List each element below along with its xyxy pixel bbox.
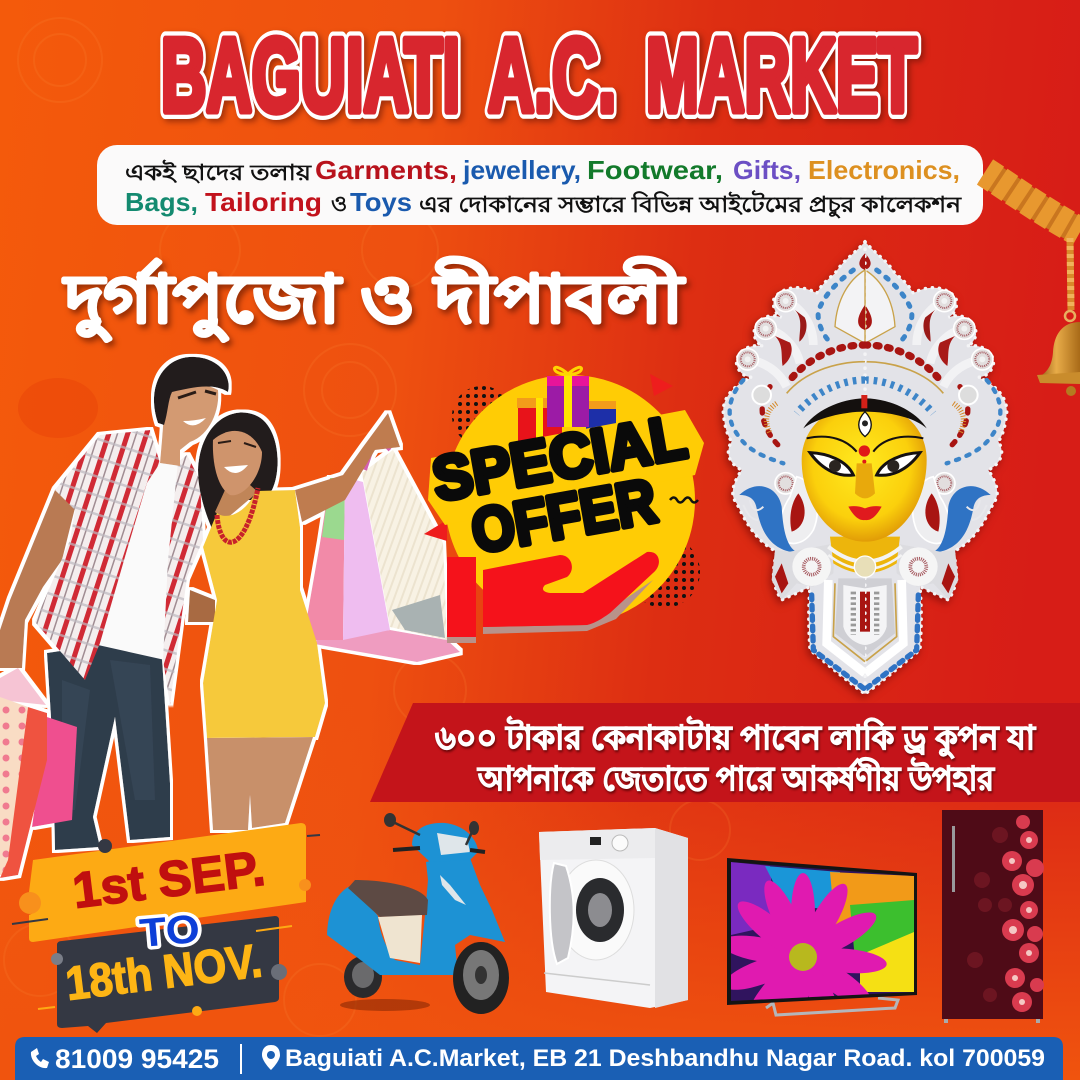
yellow banner [428, 410, 704, 525]
phone number: 81009 95425 [55, 1044, 219, 1074]
necklace [217, 488, 258, 542]
shopping bags right [303, 440, 460, 662]
woman hair [198, 412, 278, 535]
dot patterns [452, 386, 512, 446]
panel: categories pill: Footwear, [587, 155, 723, 185]
man head [160, 385, 218, 466]
special offer text [427, 402, 692, 567]
special offer text: OFFER [466, 467, 662, 567]
panel: categories pill [97, 145, 983, 225]
neck and face [830, 537, 900, 573]
left shopping bags [0, 668, 77, 878]
title: MARKET [646, 18, 917, 134]
red offer banner: ৬০০ টাকার কেনাকাটায় পাবেন লাকি ড্র কুপন যা [435, 716, 1036, 759]
panel: categories pill: Garments, [315, 155, 457, 185]
icon: location pin [262, 1045, 280, 1070]
title: BAGUIATI [161, 18, 460, 134]
yellow ticket [29, 823, 306, 942]
Durga mask [723, 242, 1007, 694]
garland and bell [985, 172, 1080, 396]
title: A.C. [488, 18, 616, 134]
title: BAGUIATI [161, 18, 460, 134]
couple with shopping bags [0, 357, 460, 878]
address: Baguiati A.C.Market, EB 21 Deshbandhu Nagar Road. kol 700059 [285, 1045, 1045, 1072]
woman neck [215, 485, 258, 520]
panel: categories pill: Gifts, [733, 155, 801, 185]
special offer badge [424, 367, 704, 643]
panel: categories pill: Electronics, [808, 155, 960, 185]
dark ticket [57, 916, 279, 1033]
woman arm [295, 413, 400, 522]
panel: categories pill: Tailoring [205, 187, 322, 217]
panel: categories pill: Bags, [125, 187, 198, 217]
man shirt left panel [35, 430, 160, 680]
woman face [213, 431, 262, 495]
contact bar [15, 1037, 1063, 1080]
scooter [327, 813, 509, 1014]
title: A.C. [488, 18, 616, 134]
panel: categories pill: ও [331, 191, 347, 216]
man tee [98, 463, 182, 660]
icon: phone [31, 1048, 49, 1068]
man arm behind woman [188, 590, 215, 622]
red hand [447, 552, 659, 643]
panel: categories pill: একই ছাদের তলায় [125, 159, 312, 185]
man arm [0, 490, 75, 668]
date text: 1st SEP: 1st SEP. [70, 840, 268, 919]
title: MARKET [646, 18, 917, 134]
man shirt right panel [163, 455, 203, 705]
gifts [517, 367, 616, 442]
panel: categories pill: এর দোকানের সম্ভারে বিভিন্ন আইটেমের প্রচুর কালেকশন [419, 190, 962, 219]
yellow circle [445, 375, 695, 625]
title [161, 18, 917, 134]
date tickets [12, 823, 320, 1033]
panel: categories pill: jewellery, [462, 155, 581, 185]
television [727, 858, 917, 1017]
red triangles [650, 374, 673, 396]
red offer banner [370, 703, 1080, 802]
woman legs [207, 737, 313, 830]
date text: TO: TO [138, 907, 202, 956]
washing machine [539, 828, 688, 1008]
red offer banner: আপনাকে জেতাতে পারে আকর্ষণীয় উপহার [477, 757, 996, 797]
woman dress [203, 490, 325, 738]
heading: festival: দুর্গাপুজো ও দীপাবলী [63, 256, 685, 342]
wave [670, 498, 698, 502]
date text: 18th NOV: 18th NOV. [63, 933, 265, 1010]
man legs [47, 645, 170, 850]
special offer text: SPECIAL [427, 402, 692, 515]
panel: categories pill: Toys [350, 187, 412, 217]
refrigerator [942, 810, 1044, 1023]
